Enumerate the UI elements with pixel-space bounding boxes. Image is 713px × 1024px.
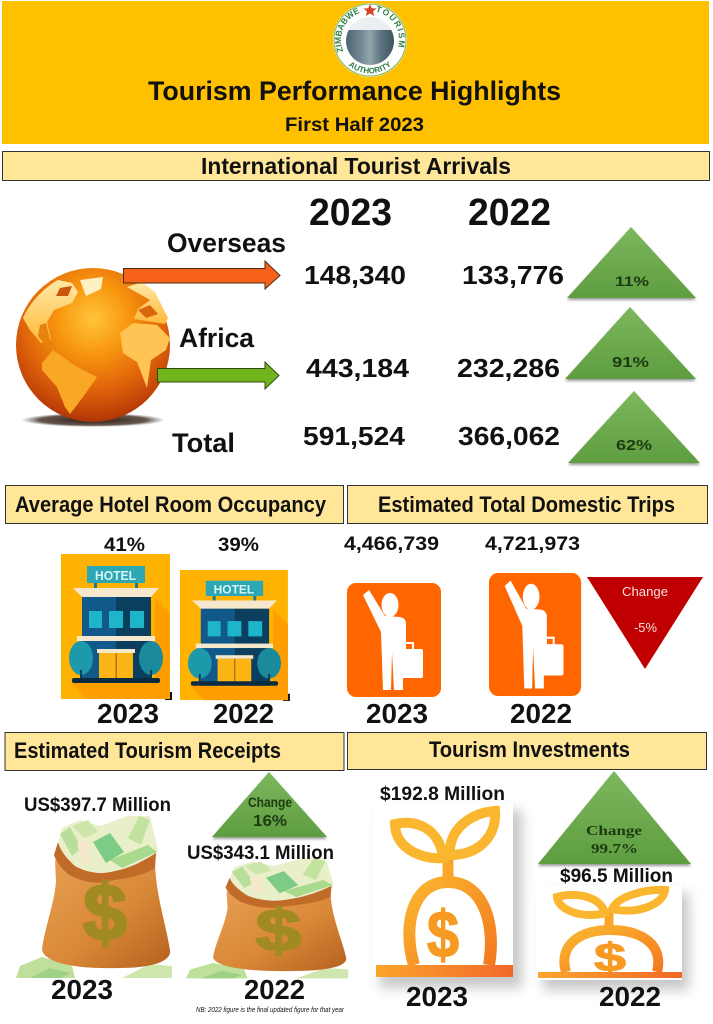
icon: plant and coin 2023	[373, 802, 522, 988]
icon: money bag 2023	[16, 816, 172, 978]
icon: Zimbabwe Tourism Authority logo: ZIMBABWE	[335, 8, 360, 53]
change triangle: receipts 16%: Change	[248, 794, 292, 810]
value: receipts 2023: US$397.7 Million	[24, 795, 171, 816]
heading: Estimated Total Domestic Trips	[348, 486, 708, 524]
icon: hotel 2023	[61, 554, 172, 700]
year label: investment 2022: 2022	[599, 981, 661, 1012]
icon: traveller 2022	[489, 573, 581, 696]
value: africa 2022: 232,286	[457, 353, 560, 383]
value: receipts 2022: US$343.1 Million	[187, 843, 334, 864]
value: total 2022: 366,062	[458, 421, 560, 451]
change triangle: receipts 16%	[212, 772, 327, 837]
value: trips 2023: 4,466,739	[344, 534, 439, 555]
panel: international arrivals	[16, 192, 700, 463]
panel: hotel occupancy	[61, 535, 290, 729]
value: occupancy 2023: 41%	[104, 535, 145, 556]
icon: Zimbabwe Tourism Authority logo	[333, 3, 407, 77]
change triangle: investment 99.7%: Change	[586, 824, 642, 839]
icon: hotel 2022: HOTEL	[214, 583, 255, 596]
icon: hotel 2023: HOTEL	[95, 568, 136, 583]
heading: Tourism Investments: Tourism Investments	[429, 737, 630, 762]
heading: Estimated Tourism Receipts	[5, 732, 344, 770]
heading: Tourism Investments	[348, 732, 706, 770]
year label: trips 2022: 2022	[510, 698, 572, 729]
icon: plant and coin 2023: $	[427, 897, 459, 971]
change triangle: overseas 11%: 11%	[615, 273, 650, 289]
label: Africa: Africa	[179, 323, 255, 353]
panel: tourism investments	[373, 771, 691, 1012]
heading: Estimated Tourism Receipts: Estimated Tourism Receipts	[14, 738, 281, 763]
change triangle: trips -5%: Change	[622, 584, 668, 599]
panel: tourism receipts	[16, 772, 348, 1014]
heading: Estimated Total Domestic Trips: Estimated Total Domestic Trips	[378, 492, 675, 517]
value: occupancy 2022: 39%	[218, 535, 259, 556]
year label: hotel 2023: 2023	[97, 698, 159, 729]
year label: hotel 2022: 2022	[213, 698, 274, 729]
year label: receipts 2023: 2023	[51, 974, 113, 1005]
value: investment 2022: $96.5 Million	[560, 866, 673, 887]
icon: money bag 2022	[186, 859, 348, 978]
icon: plant and coin 2022: $	[594, 936, 626, 980]
heading: Average Hotel Room Occupancy: Average Hotel Room Occupancy	[15, 492, 327, 517]
change triangle: investment 99.7%: 99.7%	[591, 842, 638, 857]
column year 2022: 2022	[468, 192, 551, 234]
icon: money bag 2023: $	[83, 868, 127, 957]
change triangle: africa 91%: 91%	[612, 354, 649, 371]
year label: receipts 2022: 2022	[244, 974, 305, 1005]
icon: traveller 2023	[347, 583, 441, 697]
value: overseas 2022: 133,776	[462, 260, 564, 290]
value: total 2023: 591,524	[303, 421, 406, 451]
change triangle: overseas 11%	[567, 227, 696, 298]
heading: Average Hotel Room Occupancy	[6, 486, 344, 524]
label: Total: Total	[172, 428, 235, 458]
change triangle: trips -5%	[587, 577, 703, 669]
change triangle: africa 91%	[565, 307, 696, 379]
globe shadow	[21, 413, 165, 427]
year label: trips 2023: 2023	[366, 698, 428, 729]
change triangle: total 62%: 62%	[616, 437, 652, 454]
value: trips 2022: 4,721,973	[485, 534, 580, 555]
change triangle: receipts 16%: 16%	[253, 813, 287, 830]
icon: money bag 2022: $	[256, 898, 301, 963]
heading: International Tourist Arrivals: International Tourist Arrivals	[201, 153, 511, 179]
arrow: africa	[158, 362, 279, 389]
icon: Zimbabwe Tourism Authority logo: TOURISM	[377, 6, 405, 48]
icon: globe	[16, 268, 170, 422]
column year 2023: 2023	[309, 192, 392, 234]
footnote: NB: 2022 figure is the final updated figure for that year	[196, 1007, 345, 1014]
icon: plant and coin 2022	[536, 885, 689, 990]
change triangle: investment 99.7%	[538, 771, 691, 864]
year label: investment 2023: 2023	[406, 981, 468, 1012]
heading: International Tourist Arrivals	[2, 152, 710, 180]
label: Overseas: Overseas	[167, 228, 286, 258]
icon: Zimbabwe Tourism Authority logo: AUTHORITY	[348, 61, 390, 74]
subtitle: First Half 2023	[285, 115, 424, 136]
value: africa 2023: 443,184	[306, 353, 410, 383]
title: Tourism Performance Highlights	[148, 76, 561, 106]
change triangle: trips -5%: -5%	[634, 620, 657, 635]
change triangle: total 62%	[568, 391, 700, 463]
panel: header banner	[2, 1, 709, 144]
value: investment 2023: $192.8 Million	[380, 784, 505, 805]
icon: hotel 2022	[180, 570, 290, 701]
arrow: overseas	[124, 261, 280, 289]
panel: domestic trips	[344, 534, 703, 729]
value: overseas 2023: 148,340	[304, 260, 406, 290]
